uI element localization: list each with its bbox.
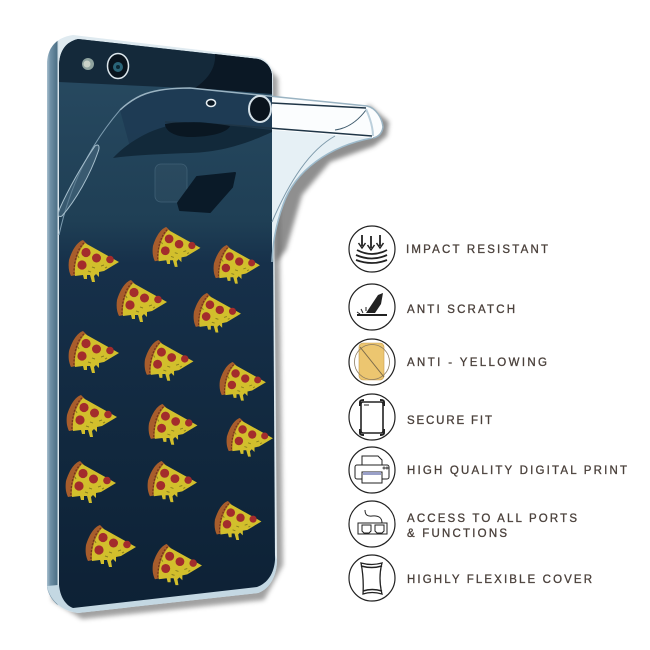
phone drop shadow xyxy=(52,40,283,619)
flap shadow xyxy=(276,104,389,262)
peeled case flap xyxy=(58,88,389,262)
case flash hole xyxy=(206,100,216,106)
pizza pattern xyxy=(66,227,273,585)
feature: anti yellowing xyxy=(349,339,547,385)
label: SECURE FIT xyxy=(407,415,492,427)
icon: ports xyxy=(349,501,395,547)
feature: impact resistant xyxy=(349,226,548,272)
label: ANTI SCRATCH xyxy=(407,304,515,316)
feature: flexible cover xyxy=(349,555,592,601)
flap rim lines xyxy=(120,88,383,138)
case bottom edge xyxy=(47,555,277,613)
icon: secure fit xyxy=(349,394,395,440)
top glass band xyxy=(59,39,272,92)
flap inner tint on phone xyxy=(120,88,272,147)
flash xyxy=(82,58,94,70)
label: ACCESS TO ALL PORTS xyxy=(407,513,577,525)
case large camera hole xyxy=(249,96,271,122)
phone in transparent case xyxy=(47,35,277,613)
fingerprint cutout outline xyxy=(155,164,187,202)
camera lens xyxy=(108,54,128,78)
icon: flexible cover xyxy=(349,555,395,601)
case camera cutout slit xyxy=(165,122,230,137)
feature: anti scratch xyxy=(349,284,515,330)
feature: digital print xyxy=(349,447,627,493)
label: IMPACT RESISTANT xyxy=(406,244,548,256)
flap clear area xyxy=(272,96,383,262)
dark top right wedge xyxy=(195,54,272,94)
label: HIGHLY FLEXIBLE COVER xyxy=(407,574,592,586)
flap curve edge xyxy=(272,138,372,262)
icon: impact xyxy=(349,226,395,272)
under flap dark arc xyxy=(113,122,272,158)
phone outer rim xyxy=(47,35,277,613)
feature: secure fit xyxy=(349,394,492,440)
icon: printer xyxy=(349,447,395,493)
icon: scratch xyxy=(349,284,395,330)
icon: yellowing xyxy=(349,339,395,385)
side button on case xyxy=(58,145,99,216)
label: ANTI - YELLOWING xyxy=(407,357,547,369)
phone body xyxy=(59,39,275,608)
label second line: & FUNCTIONS xyxy=(407,528,507,540)
feature: ports access xyxy=(349,501,577,547)
label: HIGH QUALITY DIGITAL PRINT xyxy=(407,465,627,477)
case side curve xyxy=(59,110,120,235)
phone fingerprint hole xyxy=(178,173,235,212)
